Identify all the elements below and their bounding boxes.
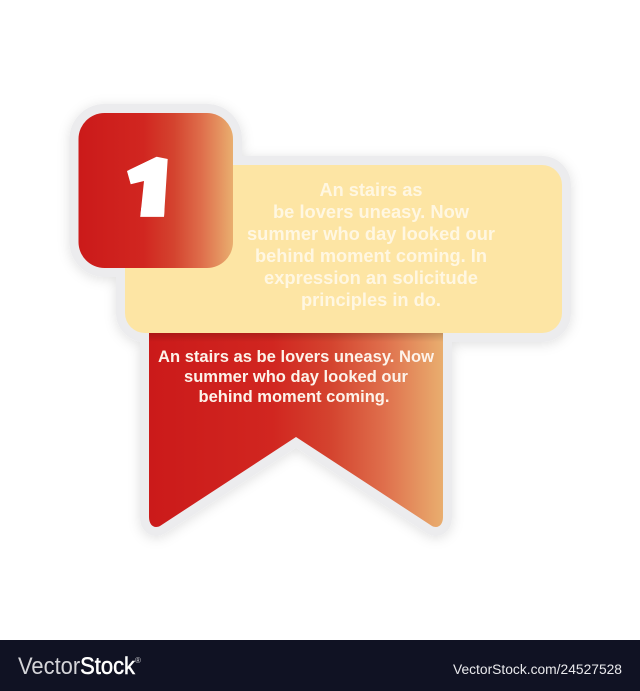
ribbon top shadow	[149, 333, 443, 342]
cream box text	[247, 180, 495, 310]
footer url: VectorStock.com/24527528	[453, 662, 622, 677]
cream box text: expression an solicitude	[264, 268, 478, 288]
badge square	[78, 113, 233, 268]
cream box text: be lovers uneasy. Now	[273, 202, 470, 222]
number 1: 1	[123, 137, 173, 237]
cream box text: summer who day looked our	[247, 224, 495, 244]
footer bar	[0, 640, 640, 691]
cream box text: principles in do.	[301, 290, 441, 310]
footer logo mark: ®	[135, 656, 141, 665]
ribbon text: summer who day looked our	[184, 367, 408, 386]
number badge	[78, 113, 233, 268]
ribbon text: An stairs as be lovers uneasy. Now	[158, 347, 435, 366]
footer logo: VectorStock	[18, 653, 136, 680]
cream box text: An stairs as	[320, 180, 422, 200]
white-grey outline halo	[78, 113, 562, 527]
ribbon text	[158, 347, 435, 406]
ribbon text: behind moment coming.	[198, 387, 390, 406]
cream box	[125, 165, 562, 333]
panel: cream text box	[125, 165, 562, 333]
ribbon shape	[149, 333, 443, 527]
cream box text: behind moment coming. In	[255, 246, 487, 266]
panel: ribbon	[149, 333, 443, 527]
